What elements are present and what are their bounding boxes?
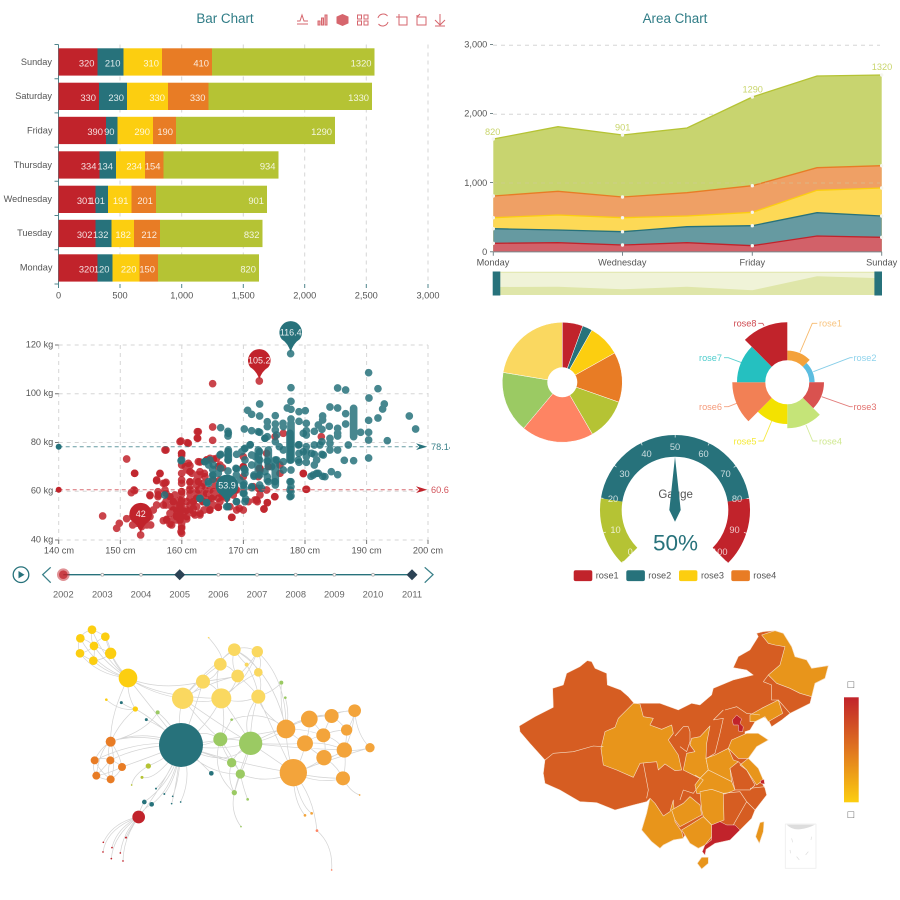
- scatter axis labels: 190 cm: [352, 545, 382, 555]
- bar value labels: 190: [157, 126, 173, 137]
- scatter axis labels: 120 kg: [26, 340, 53, 350]
- scatter axis labels: 100 kg: [26, 388, 53, 398]
- scatter axis labels: 170 cm: [228, 545, 259, 555]
- area axis labels: 3,000: [464, 40, 487, 50]
- bar: Friday: [58, 117, 335, 144]
- gauge scale labels: 20: [608, 494, 618, 504]
- scatter axis labels: 180 cm: [290, 545, 320, 555]
- gauge scale labels: 10: [610, 525, 621, 535]
- timeline years: 2009: [324, 590, 345, 600]
- area axis labels: Wednesday: [598, 258, 647, 268]
- timeline years: 2003: [92, 590, 113, 600]
- category labels: Monday: [20, 262, 53, 272]
- rose labels: [699, 318, 876, 446]
- rose labels: rose2: [854, 353, 876, 363]
- gauge scale labels: 50: [670, 442, 680, 452]
- chart: force network graph: [76, 625, 375, 871]
- chart: pie: [502, 322, 622, 442]
- mark line: teal average: 78.14: [431, 442, 454, 452]
- bar value labels: 230: [108, 92, 124, 103]
- axis lines: [54, 44, 428, 288]
- bar value labels: 90: [104, 126, 114, 137]
- timeline years: 2006: [208, 590, 229, 600]
- area: series 4: [493, 166, 882, 252]
- area axis labels: Friday: [740, 258, 765, 268]
- value axis labels: 0: [56, 290, 61, 300]
- value axis labels: 1,500: [232, 290, 255, 300]
- timeline years: 2010: [363, 590, 383, 600]
- area axis labels: 0: [482, 247, 487, 257]
- bar value labels: 1290: [311, 126, 332, 137]
- network edges: [78, 630, 370, 870]
- timeline years: 2007: [247, 590, 267, 600]
- gauge scale labels: 60: [698, 449, 709, 459]
- category labels: Wednesday: [4, 194, 52, 204]
- bar: Wednesday: [58, 186, 267, 213]
- value axis labels: 3,000: [416, 290, 440, 300]
- heading: Area Chart: Area Chart: [643, 11, 708, 26]
- gauge legend: rose1: [596, 571, 619, 581]
- bar value labels: 120: [94, 264, 110, 274]
- bar value labels: 820: [240, 264, 256, 274]
- chart: nightingale rose: [699, 318, 876, 446]
- map provinces: central orange group: [601, 703, 768, 794]
- map legend: visual range: [844, 679, 859, 821]
- timeline: [13, 567, 433, 600]
- bar value labels: 191: [113, 195, 128, 206]
- area axis labels: 1,000: [464, 178, 487, 188]
- gauge scale labels: 80: [732, 494, 742, 504]
- icon: next arrow: [425, 567, 433, 583]
- network nodes: teal hub: [120, 701, 214, 807]
- rose labels: rose7: [699, 353, 722, 363]
- value axis labels: 500: [112, 290, 128, 300]
- area data points: [493, 75, 882, 246]
- upper grid lines: [493, 45, 880, 114]
- icon: previous arrow: [43, 567, 51, 583]
- bar value labels: 302: [77, 229, 92, 240]
- map provinces: south-west orange group: [642, 789, 764, 869]
- timeline ticks: [101, 573, 374, 576]
- bar value labels: 320: [79, 264, 94, 274]
- category labels: Saturday: [15, 91, 52, 101]
- gauge ticks: [601, 436, 749, 562]
- bar value labels: 334: [81, 160, 96, 172]
- stacked areas: [493, 75, 882, 252]
- value axis labels: 1,000: [170, 290, 193, 300]
- marker pin: 42: 42: [136, 509, 146, 519]
- value axis labels: 2,000: [293, 290, 316, 300]
- map provinces: north-east orange group: [750, 631, 828, 722]
- network nodes: salmon: [316, 829, 332, 871]
- value axis labels: [56, 290, 440, 300]
- panel: area chart: [464, 11, 898, 296]
- grid line over areas: [493, 182, 880, 184]
- heading: Bar Chart: Bar Chart: [196, 11, 254, 26]
- area axis labels: Monday: [477, 258, 510, 268]
- scatter points: red series: [103, 381, 321, 535]
- legend lower label: □: [848, 809, 855, 821]
- timeline years: 2005: [169, 590, 190, 600]
- bar: Sunday: [58, 48, 374, 76]
- toolbox icons: [297, 14, 445, 26]
- rose labels: rose6: [699, 402, 722, 412]
- scatter points: red series dense core: [134, 432, 307, 533]
- gauge scale labels: 100: [712, 547, 728, 557]
- bar value labels: [77, 58, 372, 274]
- gauge scale labels: 90: [729, 525, 740, 535]
- bar value labels: 390: [87, 126, 103, 137]
- network nodes: orange cluster: [91, 737, 126, 783]
- bar value labels: 150: [139, 264, 155, 274]
- rose labels: rose5: [734, 436, 756, 446]
- panel: scatter chart: [13, 321, 454, 600]
- bar value labels: 132: [93, 229, 108, 240]
- chart: gauge: [574, 435, 776, 581]
- scatter axis labels: 200 cm: [413, 545, 443, 555]
- area top lines: [493, 75, 882, 246]
- area: series 5: [493, 75, 882, 252]
- gauge legend: [574, 570, 776, 581]
- bar value labels: 934: [260, 160, 276, 172]
- area axis labels: Sunday: [866, 258, 898, 268]
- bar value labels: 212: [141, 229, 157, 240]
- stacked bars: [58, 48, 374, 282]
- area: series 2: [493, 213, 882, 252]
- bar value labels: 901: [248, 195, 264, 206]
- map regions: red highlighted provinces: [702, 715, 765, 855]
- bar value labels: 154: [145, 160, 160, 172]
- area value labels: 820: [485, 127, 500, 137]
- scatter axis labels: 160 cm: [167, 545, 197, 555]
- marker pin: 53.9: [216, 475, 238, 505]
- mark line: red average: 60.6: [431, 485, 449, 495]
- timeline years: 2004: [131, 590, 151, 600]
- area: series 1: [493, 236, 882, 252]
- legend gradient bar: [844, 697, 859, 802]
- rose labels: rose3: [854, 402, 876, 412]
- area axes: [490, 44, 882, 256]
- bar value labels: 290: [134, 126, 150, 137]
- timeline years: 2011: [402, 590, 422, 600]
- gauge scale labels: [608, 442, 742, 557]
- timeline current marker: [57, 568, 70, 581]
- legend upper label: □: [848, 679, 855, 691]
- bar value labels: 210: [105, 58, 120, 68]
- category labels: Tuesday: [17, 228, 52, 238]
- area axis labels: [464, 40, 898, 268]
- bar value labels: 832: [244, 229, 260, 240]
- area: series 3: [493, 188, 882, 252]
- rose labels: rose8: [734, 318, 756, 328]
- area value labels: 1320: [872, 62, 892, 72]
- panel: bar chart: [4, 11, 445, 300]
- gauge scale labels: 0: [628, 547, 633, 557]
- rose labels: rose1: [819, 318, 842, 328]
- bar value labels: 134: [97, 160, 113, 172]
- network nodes: light orange cluster: [277, 704, 375, 817]
- scatter axis labels: 80 kg: [31, 437, 53, 447]
- scatter axis labels: [26, 340, 443, 555]
- rose label lines: [724, 323, 853, 441]
- bar value labels: 410: [193, 58, 209, 68]
- network nodes: pale yellow cluster: [172, 637, 265, 709]
- category labels: Thursday: [14, 160, 52, 170]
- area axis labels: 2,000: [464, 109, 487, 119]
- category labels: Friday: [27, 126, 53, 136]
- scatter points: teal series dense core: [182, 432, 325, 507]
- gauge value: 50%: [653, 531, 698, 556]
- scatter axis labels: 60 kg: [31, 486, 53, 496]
- bar: Thursday: [58, 151, 278, 179]
- area value labels: [485, 62, 892, 137]
- bar value labels: 330: [149, 92, 165, 103]
- value axis labels: 2,500: [355, 290, 378, 300]
- gauge title: Gauge: [658, 489, 693, 501]
- marker pin: 42: [129, 503, 152, 533]
- network nodes: red cluster: [102, 811, 145, 862]
- gauge scale labels: 40: [641, 449, 652, 459]
- bar value labels: 310: [143, 58, 159, 68]
- bar value labels: 1320: [351, 58, 372, 68]
- gauge legend: rose4: [753, 571, 776, 581]
- timeline diamonds: [174, 569, 418, 580]
- network nodes: green cluster: [156, 681, 287, 827]
- bar: Saturday: [58, 83, 372, 110]
- grid lines: [120, 44, 428, 284]
- gauge legend: rose2: [648, 571, 671, 581]
- bar: Tuesday: [58, 220, 262, 247]
- category labels: [4, 57, 53, 272]
- area value labels: 901: [615, 122, 630, 132]
- area value labels: 1290: [742, 84, 763, 94]
- network nodes: yellow cluster: [76, 625, 138, 712]
- marker pin: 116.4: [279, 321, 302, 352]
- network nodes: olive group: [131, 763, 151, 786]
- icon: play button: [13, 567, 29, 582]
- rose sectors: [732, 322, 824, 428]
- timeline track: [63, 574, 412, 576]
- gauge needle: [669, 457, 681, 522]
- gauge legend: rose3: [701, 571, 724, 581]
- scatter axis labels: 40 kg: [31, 535, 53, 545]
- bar value labels: 1330: [348, 92, 369, 103]
- marker pin: 105.2: [248, 349, 271, 379]
- scatter axis ticks: [55, 345, 428, 544]
- scatter axis labels: 140 cm: [44, 545, 74, 555]
- bar value labels: 220: [121, 264, 136, 274]
- gauge band: low: [600, 498, 637, 563]
- mark line: red average: [56, 486, 448, 493]
- gauge band: middle: [601, 435, 749, 502]
- bar value labels: 330: [80, 92, 96, 103]
- timeline years: [53, 590, 422, 600]
- chart: China map: [519, 631, 828, 869]
- category labels: Sunday: [21, 57, 52, 67]
- map province borders: [545, 675, 790, 825]
- map base silhouette: [519, 631, 828, 855]
- scatter points: teal series: [165, 354, 416, 507]
- gauge scale labels: 30: [619, 469, 630, 479]
- bar value labels: 301: [77, 195, 92, 206]
- marker pin: 53.9: 53.9: [218, 481, 236, 491]
- gauge band: high: [713, 498, 750, 563]
- data zoom slider: [493, 272, 882, 296]
- timeline years: 2002: [53, 590, 74, 600]
- bar value labels: 320: [79, 58, 94, 68]
- rose labels: rose4: [819, 436, 842, 446]
- scatter axis labels: 150 cm: [105, 545, 136, 555]
- marker pin: 116.4: 116.4: [280, 327, 302, 337]
- timeline years: 2008: [285, 590, 306, 600]
- bar value labels: 182: [115, 229, 131, 240]
- bar value labels: 234: [126, 160, 142, 172]
- map inset: South China Sea: [785, 824, 816, 868]
- mark line: teal average: [56, 443, 450, 450]
- scatter grid: [59, 345, 428, 540]
- marker pin: 105.2: 105.2: [248, 355, 271, 365]
- bar: Monday: [58, 254, 259, 282]
- bar value labels: 101: [89, 195, 105, 206]
- gauge scale labels: 70: [720, 469, 731, 479]
- bar value labels: 201: [137, 195, 153, 206]
- bar value labels: 330: [190, 92, 206, 103]
